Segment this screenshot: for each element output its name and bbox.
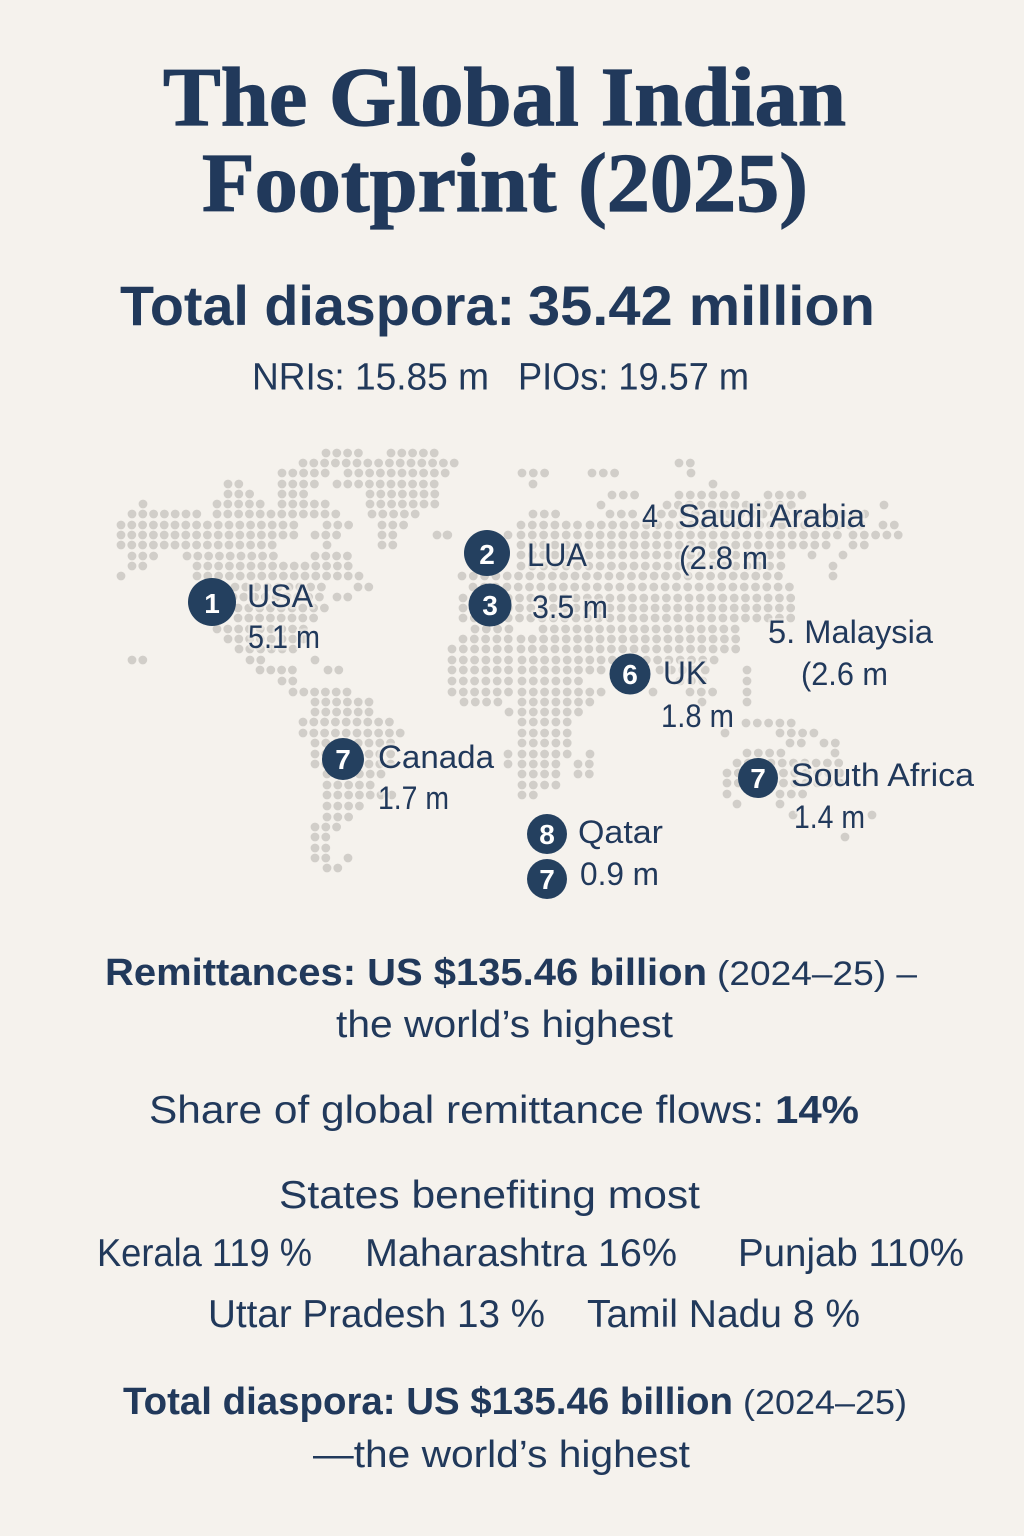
NRI and PIO split: PIOs: 19.57 m — [518, 356, 749, 398]
closing statement: Total diaspora: US $135.46 billion — [123, 1381, 733, 1423]
share of global remittance flows: 14% — [775, 1089, 859, 1132]
states benefiting most: Kerala 119 % — [97, 1232, 312, 1275]
states benefiting most: States benefiting most — [279, 1174, 700, 1217]
marker: 0.9 m: 7 — [539, 864, 555, 895]
NRI and PIO split — [252, 356, 749, 398]
marker: LUA: LUA — [527, 537, 588, 573]
marker: Canada — [322, 738, 494, 816]
headline stat: total diaspora — [120, 274, 875, 337]
label: Malaysia: (2.6 m — [801, 656, 888, 692]
marker: UK: 6 — [622, 659, 638, 690]
marker: USA — [188, 578, 320, 655]
headline stat: total diaspora: Total diaspora: — [120, 274, 515, 337]
marker: Qatar: Qatar — [578, 814, 663, 850]
marker: South Africa: 1.4 m — [794, 799, 865, 835]
title: The Global Indian — [163, 51, 846, 144]
marker: UK: UK — [663, 655, 707, 691]
marker: LUA: 2 — [479, 539, 495, 570]
marker: South Africa — [738, 757, 974, 835]
marker: USA: USA — [247, 578, 314, 614]
marker: USA: 1 — [204, 588, 220, 619]
marker: Qatar — [527, 814, 663, 854]
marker: 0.9 m: 0.9 m — [580, 856, 659, 892]
closing statement: (2024–25) — [743, 1384, 907, 1422]
states benefiting most: Punjab 110% — [738, 1232, 964, 1275]
marker: USA: 5.1 m — [248, 619, 320, 655]
marker: 3.5 m: 3.5 m — [532, 589, 608, 625]
title: Footprint (2025) — [202, 137, 808, 230]
dotted world map — [121, 453, 907, 868]
remittances text — [105, 952, 917, 1046]
title — [163, 51, 846, 230]
map dots: east — [447, 463, 907, 837]
label: Saudi Arabia: 4 — [642, 498, 658, 534]
marker: Canada: 1.7 m — [378, 780, 449, 816]
headline stat: total diaspora: 35.42 million — [528, 274, 875, 337]
remittances text: (2024–25) – — [717, 955, 917, 993]
label: Saudi Arabia: (2.8 m — [679, 540, 768, 576]
marker: UK: 1.8 m — [661, 698, 734, 734]
map dots: west — [121, 453, 458, 868]
NRI and PIO split: NRIs: 15.85 m — [252, 356, 489, 398]
label: Saudi Arabia: Saudi Arabia — [678, 498, 865, 534]
states benefiting most — [97, 1174, 964, 1336]
closing statement — [123, 1381, 907, 1476]
remittances text: the world’s highest — [336, 1004, 673, 1046]
marker: 3.5 m: 3 — [482, 590, 498, 621]
marker: South Africa: 7 — [750, 763, 766, 794]
states benefiting most: Maharashtra 16% — [365, 1232, 677, 1275]
label: Saudi Arabia — [642, 498, 865, 576]
marker: Canada: 7 — [335, 744, 351, 775]
marker: South Africa: South Africa — [791, 757, 974, 793]
label: Malaysia — [768, 614, 933, 692]
remittances text: Remittances: US $135.46 billion — [105, 952, 707, 994]
marker: 0.9 m — [527, 856, 659, 899]
marker: UK — [610, 654, 734, 734]
closing statement: —the world’s highest — [313, 1434, 690, 1476]
label: Malaysia: 5. Malaysia — [768, 614, 933, 650]
marker: LUA — [464, 530, 588, 576]
marker: Qatar: 8 — [539, 819, 555, 850]
states benefiting most: Tamil Nadu 8 % — [587, 1293, 860, 1336]
states benefiting most: Uttar Pradesh 13 % — [208, 1293, 545, 1336]
marker: 3.5 m — [468, 584, 608, 626]
marker: Canada: Canada — [378, 739, 494, 775]
share of global remittance flows: Share of global remittance flows: — [149, 1089, 764, 1132]
